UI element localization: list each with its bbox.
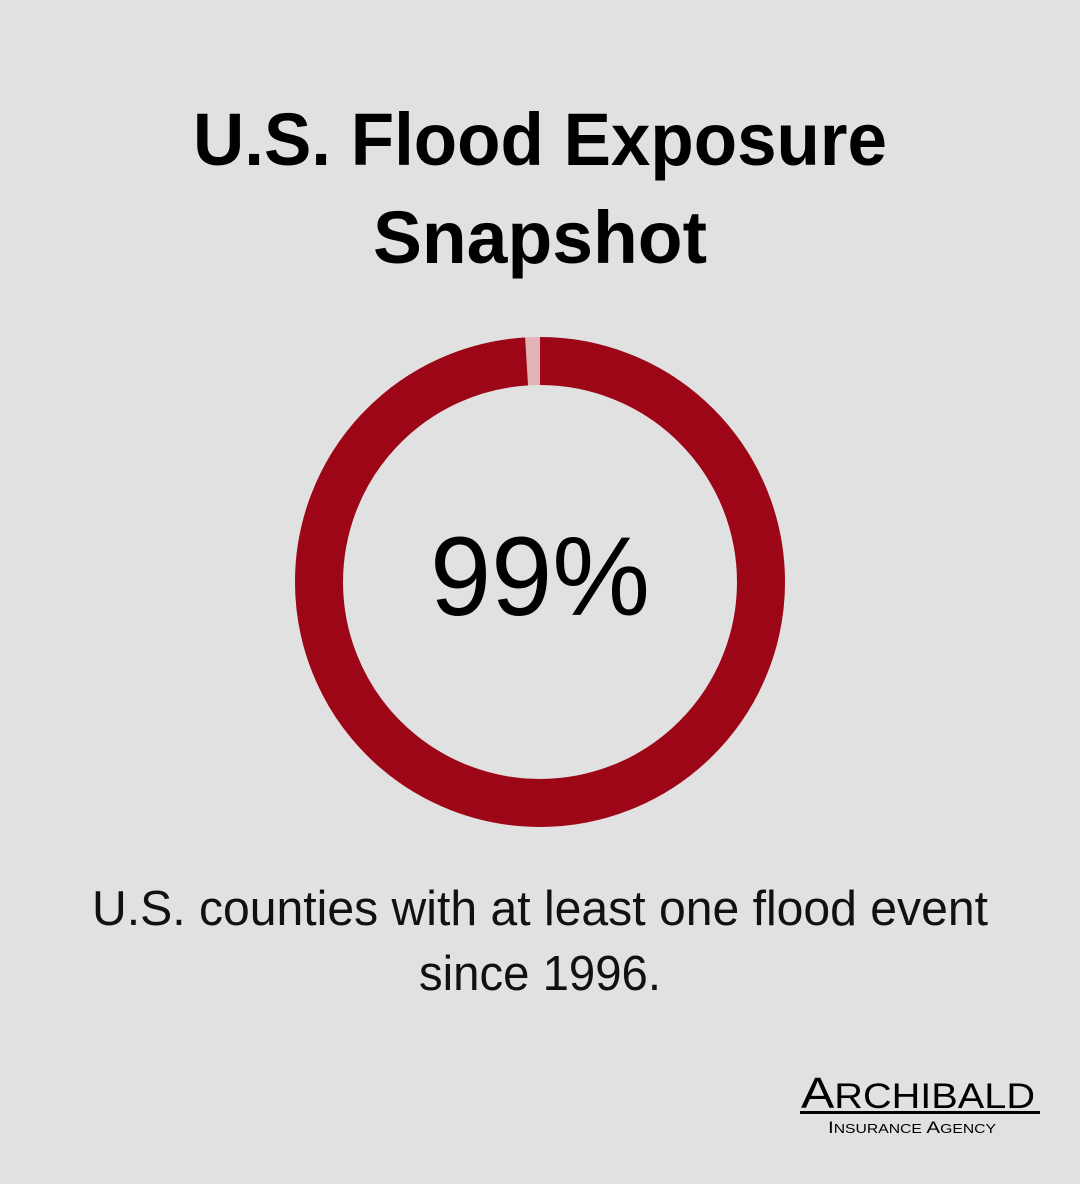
title: Snapshot <box>373 196 707 279</box>
title <box>193 98 887 279</box>
logo: Archibald Insurance Agency: INSURANCE AGENCY <box>828 1118 996 1137</box>
description text: since 1996. <box>419 947 661 1001</box>
logo: Archibald Insurance Agency: ARCHIBALD <box>801 1069 1035 1118</box>
center value: 99% <box>430 514 650 639</box>
description text: U.S. counties with at least one flood event <box>92 882 988 936</box>
description text <box>92 882 988 1001</box>
donut chart: 99% <box>319 361 761 803</box>
logo: Archibald Insurance Agency <box>800 1069 1040 1137</box>
title: U.S. Flood Exposure <box>193 98 887 181</box>
